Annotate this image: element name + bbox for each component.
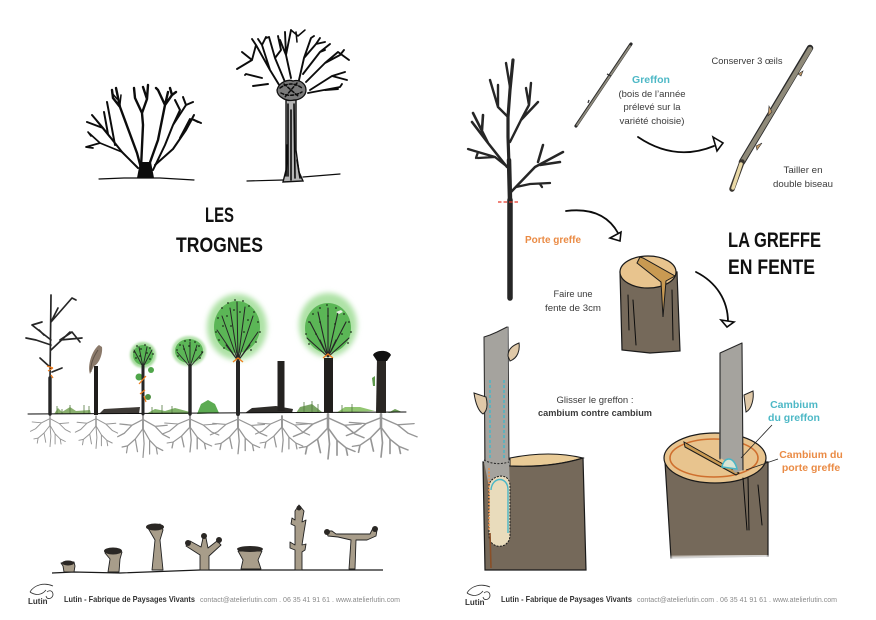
label: tailler en double biseau: double biseau: [773, 179, 833, 190]
arrow: rootstock to stump: [566, 210, 621, 241]
tree: young bare tree: [26, 295, 82, 414]
label: tailler en double biseau: Tailler en: [784, 165, 822, 176]
label: greffon: prélevé sur la: [624, 102, 681, 113]
illustration: rootstock tree: [468, 60, 563, 298]
shape: low stump: [61, 562, 75, 572]
title: les trognes: TROGNES: [176, 234, 263, 257]
label: glisser le greffon: Glisser le greffon :: [556, 395, 634, 406]
label: cambium du porte greffe: Cambium du: [779, 449, 843, 461]
footer: left: contact@atelierlutin.com . 06 35 41 91 61 . www.atelierlutin.com: [200, 595, 400, 604]
shape: wide head pollard: [238, 551, 262, 569]
label: faire une fente: fente de 3cm: [545, 303, 601, 314]
illustration: pollard shapes: [52, 505, 383, 573]
label: glisser le greffon: [538, 395, 652, 419]
title: la greffe en fente: [728, 229, 821, 279]
shape: three-arm pollard: [186, 538, 221, 570]
footer: left: Lutin - Fabrique de Paysages Vivants: [64, 594, 195, 604]
illustration: split stump: [620, 256, 680, 353]
shape: short pollard: [105, 549, 122, 572]
label: conserver 3 oeils: Conserver 3 œils: [712, 56, 783, 67]
illustration: cépée tree: [86, 85, 201, 180]
panel: la greffe en fente: [465, 44, 843, 607]
illustration: tree growth and pollarding sequence: [26, 293, 417, 459]
label: cambium du greffon: [768, 399, 820, 424]
panel: les trognes: [26, 30, 417, 606]
label: glisser le greffon: cambium contre cambium: [538, 408, 652, 419]
label: faire une fente: Faire une: [554, 289, 592, 300]
logo: lutin: Lutin: [465, 598, 485, 607]
logo: lutin: Lutin: [28, 597, 48, 606]
footer: right: [465, 585, 837, 607]
footer: right: contact@atelierlutin.com . 06 35 41 91 61 . www.atelierlutin.com: [637, 595, 837, 604]
arrow: scion to cut scion: [638, 137, 723, 152]
title: les trognes: LES: [205, 204, 234, 227]
title: la greffe en fente: EN FENTE: [728, 256, 815, 279]
label: cambium du porte greffe: porte greffe: [782, 462, 840, 474]
tree: first crown: [172, 336, 206, 414]
tree: pollarded post: [278, 361, 284, 411]
label: greffon: Greffon: [632, 74, 670, 86]
illustration: têtard tree: [237, 30, 349, 182]
footer: right: Lutin - Fabrique de Paysages Vivants: [501, 594, 632, 604]
logo: lutin: [28, 584, 53, 606]
label: faire une fente: [545, 289, 601, 314]
label: tailler en double biseau: [773, 165, 833, 190]
illustration: scion twig: [576, 44, 631, 126]
illustration: finished graft: [664, 343, 778, 558]
label: greffon: [618, 74, 686, 127]
title: la greffe en fente: LA GREFFE: [728, 229, 821, 252]
label: cambium du greffon: Cambium: [770, 399, 818, 411]
logo: lutin: [465, 585, 490, 607]
label: greffon: (bois de l’année: [618, 89, 686, 100]
tree: mature pollard crown: [299, 293, 357, 413]
shape: pagoda pollard: [290, 505, 306, 570]
shape: tall pollard: [148, 524, 163, 570]
label: cambium du porte greffe: [779, 449, 843, 474]
label: porte greffe: Porte greffe: [525, 235, 581, 246]
ground vegetation: [28, 400, 406, 414]
shape: T pollard: [326, 528, 377, 569]
pollard tops: [62, 506, 378, 566]
footer: left: [28, 584, 400, 606]
label: greffon: variété choisie): [620, 116, 684, 127]
illustration: cut scion: [732, 48, 810, 189]
tree: small grafted: [130, 342, 156, 414]
arrow: stump to graft: [696, 272, 734, 327]
title: les trognes: [176, 204, 263, 257]
tree: old hollow pollard: [372, 351, 391, 413]
label: cambium du greffon: du greffon: [768, 412, 820, 424]
bird on post: [89, 345, 102, 415]
tree: large crown: [207, 294, 267, 414]
roots: [30, 414, 417, 459]
illustration: graft cross-section: [474, 327, 586, 570]
